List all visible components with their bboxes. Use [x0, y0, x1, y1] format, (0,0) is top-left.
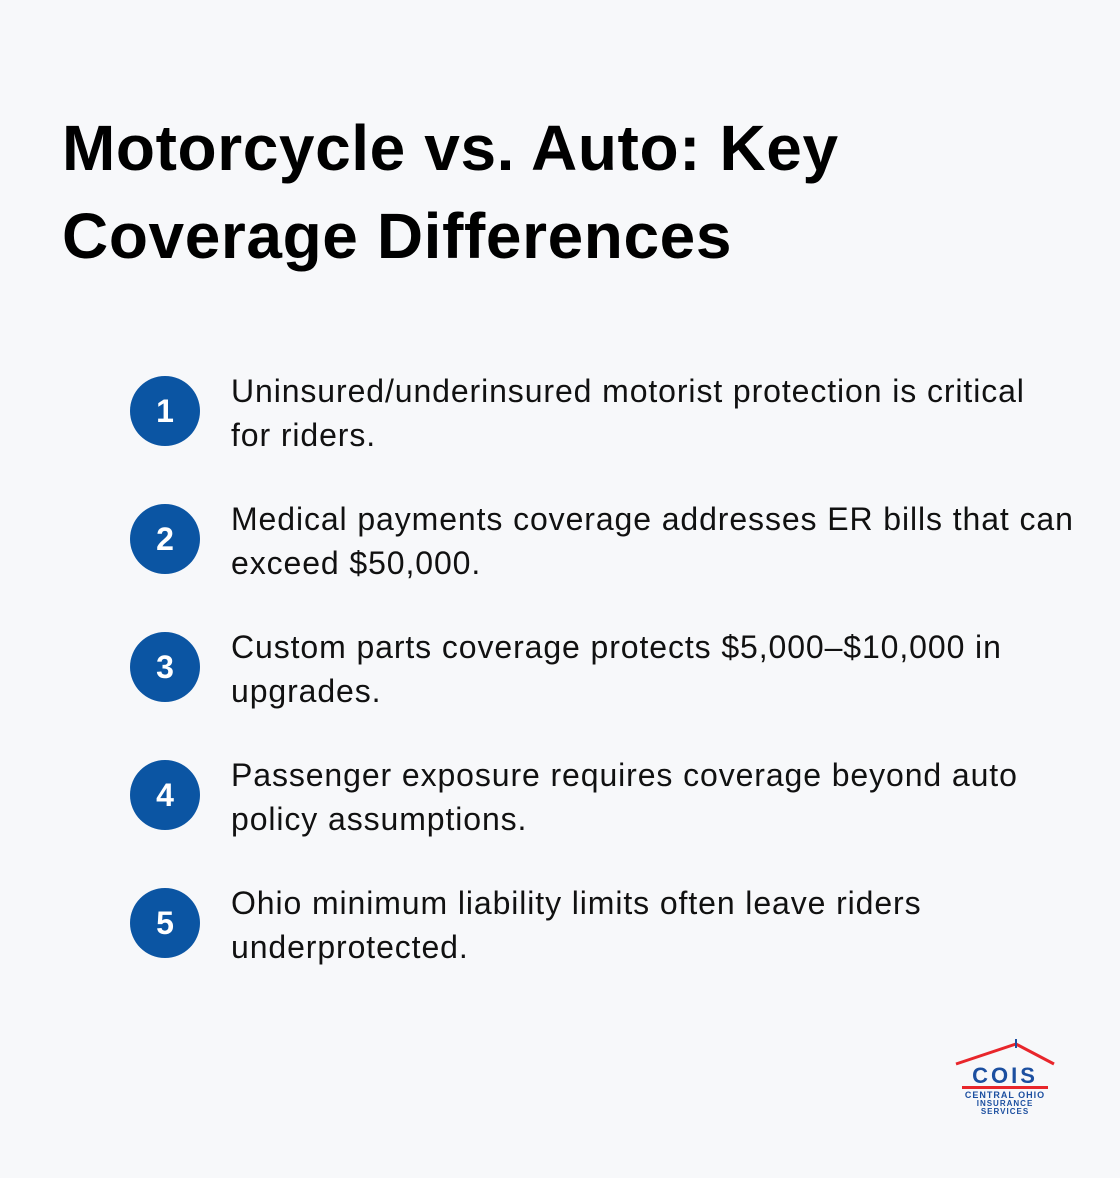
item 4: 4 — [156, 777, 174, 813]
item 5 — [130, 885, 922, 965]
item 5: Ohio minimum liability limits often leave riders — [231, 885, 922, 921]
title: Motorcycle vs. Auto: Key — [62, 112, 839, 184]
item 1 — [130, 373, 1025, 453]
title: Coverage Differences — [62, 200, 732, 272]
item 4 — [130, 757, 1018, 837]
item 3: 3 — [156, 649, 174, 685]
item 5: 5 — [156, 905, 174, 941]
logo: COIS — [972, 1063, 1038, 1088]
item 2: 2 — [156, 521, 174, 557]
title — [62, 112, 839, 272]
item 1: Uninsured/underinsured motorist protection is critical — [231, 373, 1025, 409]
logo — [956, 1039, 1055, 1116]
item 1: 1 — [156, 393, 174, 429]
item 4: Passenger exposure requires coverage beyond auto — [231, 757, 1018, 793]
item 4: policy assumptions. — [231, 801, 527, 837]
item 2: exceed $50,000. — [231, 545, 481, 581]
item 2: Medical payments coverage addresses ER bills that can — [231, 501, 1074, 537]
item 3: Custom parts coverage protects $5,000–$10,000 in — [231, 629, 1002, 665]
item 3 — [130, 629, 1002, 709]
item 3: upgrades. — [231, 673, 381, 709]
logo: INSURANCE — [977, 1099, 1033, 1108]
item 5: underprotected. — [231, 929, 469, 965]
item 1: for riders. — [231, 417, 376, 453]
logo: CENTRAL OHIO — [965, 1090, 1045, 1100]
item 2 — [130, 501, 1074, 581]
logo: SERVICES — [981, 1107, 1029, 1116]
